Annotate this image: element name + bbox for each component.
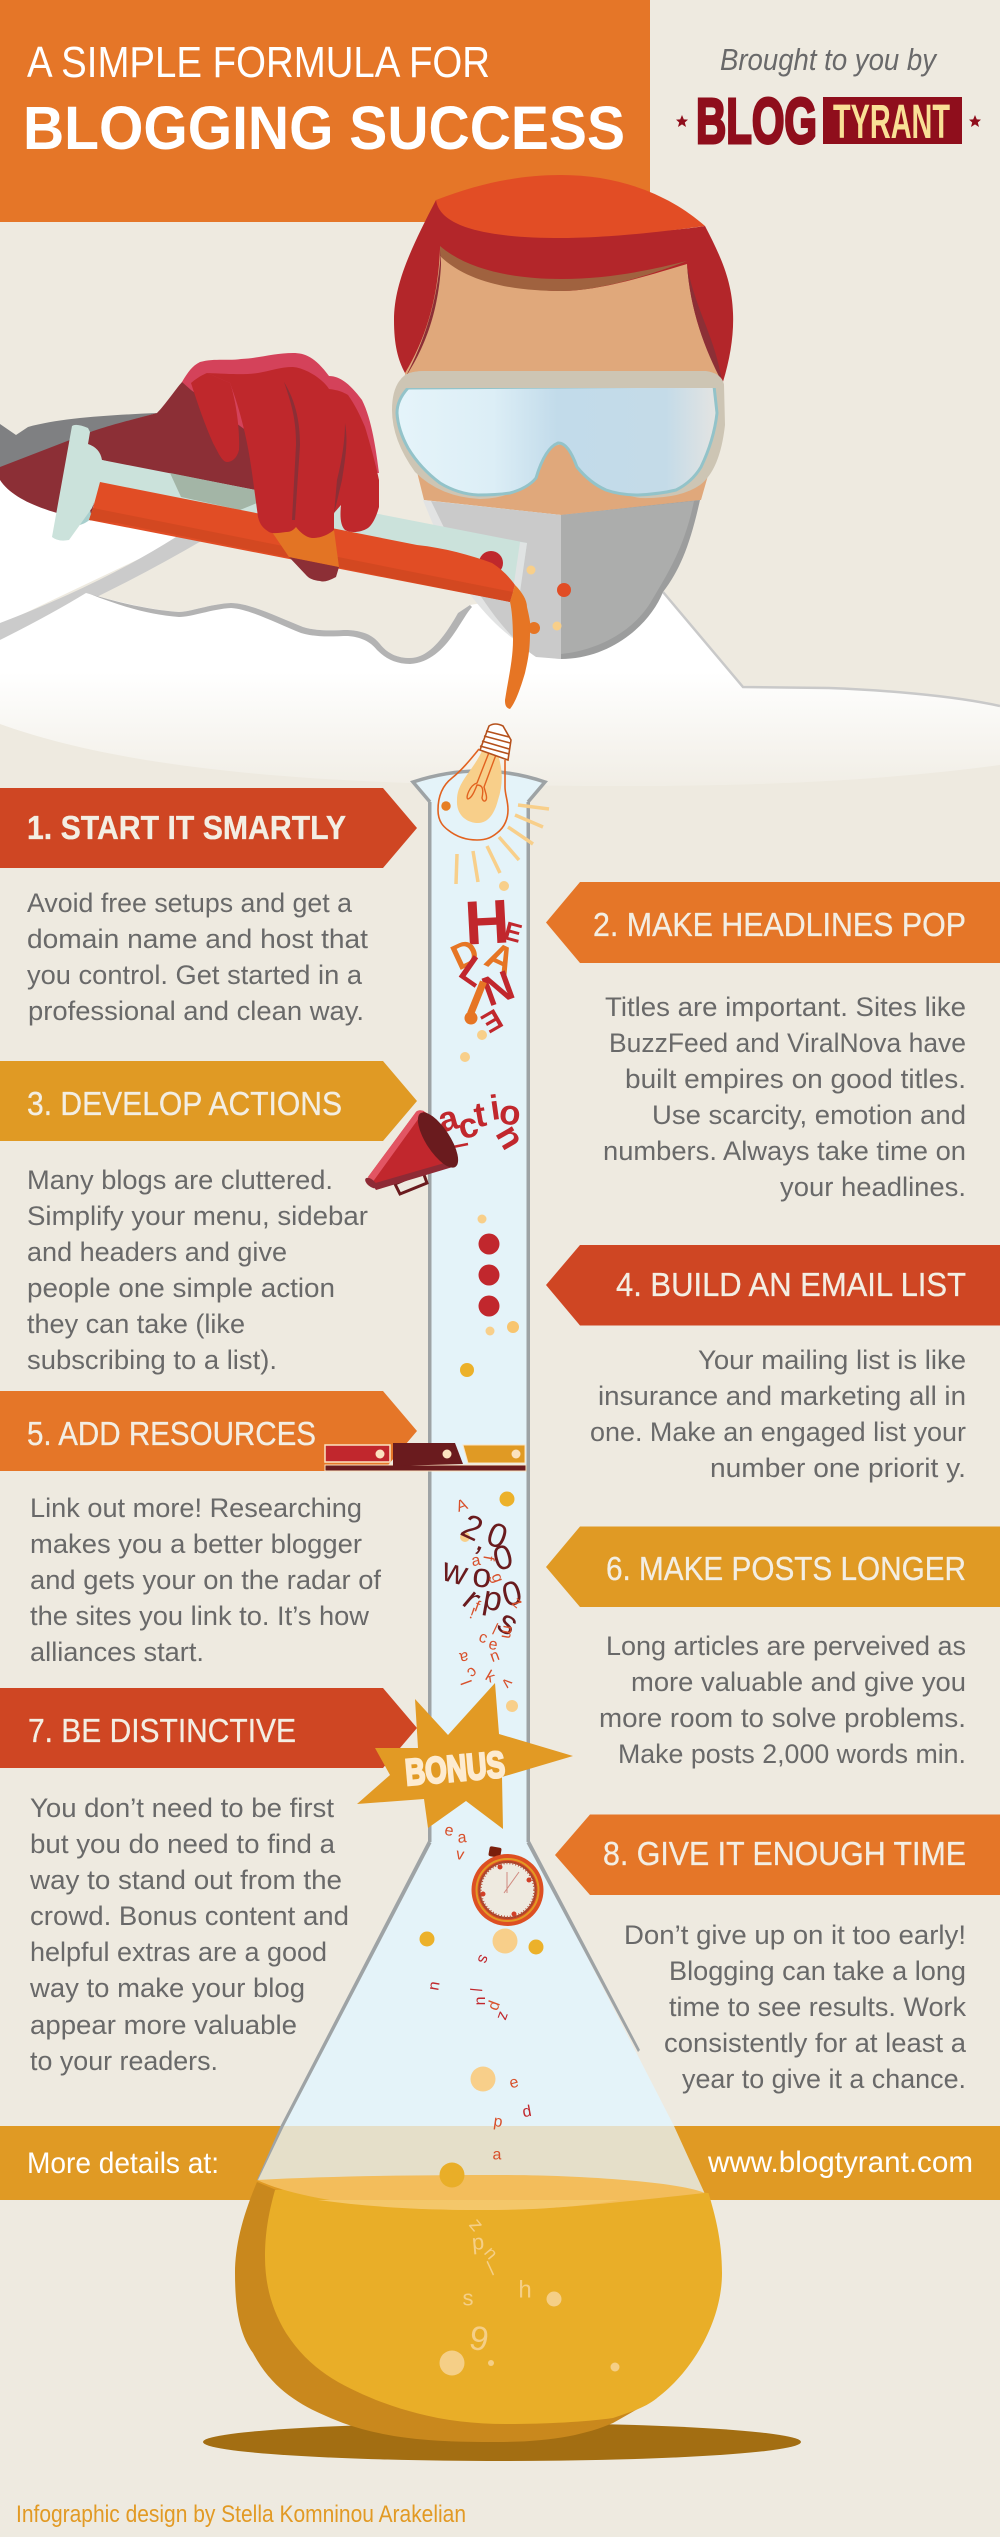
letters in liquid: h <box>518 2276 532 2304</box>
text block 2: BuzzFeed and ViralNova have <box>609 1028 966 1058</box>
letters in liquid: / <box>482 2259 501 2279</box>
banner 3: 3. DEVELOP ACTIONS <box>27 1085 342 1122</box>
falling letters: v <box>455 1846 465 1864</box>
action letters: t <box>471 1095 489 1135</box>
text block 1: professional and clean way. <box>28 996 364 1026</box>
liquid outer shade <box>235 2182 657 2442</box>
action letters: n <box>488 1118 532 1156</box>
title line two: BLOGGING SUCCESS <box>23 94 625 162</box>
banner 6: 6. MAKE POSTS LONGER <box>606 1550 966 1587</box>
banner 5 <box>0 1391 417 1471</box>
hair shadow on forehead <box>440 246 687 291</box>
test tube glass <box>52 425 527 592</box>
headline letters: D <box>445 930 485 978</box>
gray sleeve <box>0 413 157 468</box>
liquid surface <box>257 2175 704 2210</box>
bulb glow <box>457 751 502 823</box>
words letters: z <box>508 1594 526 1612</box>
text block 6 <box>599 1631 966 1769</box>
lower flask dots and letters <box>420 1928 544 2188</box>
headline letters: A <box>479 934 521 984</box>
text block 5: alliances start. <box>30 1637 204 1667</box>
liquid in tube <box>89 482 515 602</box>
flask glass <box>282 771 674 2126</box>
words letters: w <box>437 1550 472 1594</box>
text block 8: time to see results. Work <box>669 1992 966 2022</box>
falling letters <box>443 1822 467 1864</box>
banner 8: 8. GIVE IT ENOUGH TIME <box>603 1835 966 1872</box>
lower flask dots and letters: u <box>426 1980 444 1992</box>
sponsor caption: Brought to you by <box>720 42 938 77</box>
filaments <box>467 750 497 801</box>
text block 1: Avoid free setups and get a <box>27 888 353 918</box>
text block 8: year to give it a chance. <box>682 2064 966 2094</box>
liquid shade <box>89 508 513 602</box>
words letters: 2 <box>455 1507 489 1549</box>
glove fingers <box>207 367 379 538</box>
text block 1: domain name and host that <box>27 924 369 954</box>
bulb dot <box>441 801 451 811</box>
words letters: 0 <box>498 1573 526 1615</box>
lower flask dots and letters: z <box>494 2009 512 2023</box>
banner 8 <box>555 1814 1000 1895</box>
text block 8: consistently for at least a <box>664 2028 967 2058</box>
flask walls <box>257 771 640 2180</box>
headline letters: N <box>476 961 520 1015</box>
headline letters: L <box>451 948 495 996</box>
more details label: More details at: <box>27 2147 219 2180</box>
banner 5: 5. ADD RESOURCES <box>27 1415 316 1452</box>
header panel <box>0 0 650 222</box>
glove cuff <box>182 353 379 473</box>
bulb glass outline <box>438 749 508 840</box>
text block 6: Long articles are perveived as <box>606 1631 966 1661</box>
lower flask dots and letters: e <box>507 2074 521 2092</box>
text block 8: Don’t give up on it too early! <box>624 1920 966 1950</box>
words letters: ! <box>467 1605 477 1623</box>
letters in liquid <box>440 2214 620 2376</box>
text block 6: Make posts 2,000 words min. <box>618 1739 966 1769</box>
text block 3: Many blogs are cluttered. <box>27 1165 333 1195</box>
pouring liquid <box>505 585 530 709</box>
face <box>405 249 724 515</box>
words letters: l <box>456 1678 474 1688</box>
banner 2: 2. MAKE HEADLINES POP <box>593 906 966 943</box>
lower flask dots and letters: s <box>474 1952 492 1966</box>
text block 7: way to make your blog <box>29 1973 305 2003</box>
text block 8 <box>624 1920 967 2094</box>
glove thumb <box>191 373 239 462</box>
action letters: i <box>487 1088 503 1128</box>
words letters: 0 <box>489 1537 517 1579</box>
text block 3: people one simple action <box>27 1273 335 1303</box>
words letters: u <box>488 1647 502 1667</box>
words letters: c <box>476 1629 490 1647</box>
headline letters: E <box>501 915 525 949</box>
words letters: m <box>497 1624 517 1640</box>
glove creases <box>284 382 346 520</box>
text block 4: number one priorit y. <box>710 1453 966 1483</box>
words letters: , <box>471 1521 495 1559</box>
text block 5: makes you a better blogger <box>30 1529 362 1559</box>
words letters: v <box>498 1674 516 1692</box>
headline letters: E <box>476 1003 508 1039</box>
words letters: a <box>470 1552 482 1570</box>
light rays <box>456 805 549 884</box>
hair <box>394 200 733 385</box>
falling letters: e <box>443 1822 455 1840</box>
flask neck over bar <box>258 2126 704 2193</box>
bonus star <box>357 1683 573 1829</box>
falling letters: a <box>457 1829 467 1847</box>
hair inner shade <box>405 250 722 382</box>
text block 5: and gets your on the radar of <box>30 1565 381 1595</box>
text block 3: they can take (like <box>27 1309 245 1339</box>
text block 7: appear more valuable <box>30 2010 297 2040</box>
lower flask dots and letters: d <box>521 2103 533 2121</box>
text block 3: Simplify your menu, sidebar <box>27 1201 368 1231</box>
text block 2: built empires on good titles. <box>625 1064 966 1094</box>
text block 8: Blogging can take a long <box>669 1956 966 1986</box>
drip droplets <box>526 566 571 634</box>
banner 1: 1. START IT SMARTLY <box>27 809 346 846</box>
words letters: r <box>455 1581 489 1617</box>
banner 7: 7. BE DISTINCTIVE <box>28 1712 296 1749</box>
words letters: 0 <box>482 1515 512 1557</box>
text block 4: insurance and marketing all in <box>598 1381 966 1411</box>
words letters: f <box>479 1554 497 1562</box>
text block 3 <box>27 1165 368 1375</box>
lower flask dots and letters: p <box>492 2113 504 2131</box>
bonus text: BONUS <box>403 1744 507 1793</box>
text block 2: Titles are important. Sites like <box>605 992 966 1022</box>
lower flask dots and letters: p <box>485 1999 505 2013</box>
text block 7: but you do need to find a <box>30 1829 336 1859</box>
text block 2: numbers. Always take time on <box>603 1136 966 1166</box>
hair cap <box>436 175 705 238</box>
letters in liquid: s <box>462 2286 474 2310</box>
words letters: / <box>491 1621 499 1639</box>
bottom bar <box>0 2126 1000 2200</box>
fingers through liquid <box>272 525 339 567</box>
text block 2: your headlines. <box>780 1172 966 1202</box>
text block 3: and headers and give <box>27 1237 287 1267</box>
headline letters <box>445 881 525 1062</box>
text block 7: helpful extras are a good <box>30 1937 327 1967</box>
text block 2 <box>603 992 966 1202</box>
words letters: s <box>491 1602 525 1644</box>
banner 3 <box>0 1061 417 1141</box>
flask shadow <box>203 2423 801 2461</box>
words letters: g <box>487 1571 507 1585</box>
shadow through glass <box>170 473 257 510</box>
design credit: Infographic design by Stella Komninou Arakelian <box>16 2501 466 2528</box>
words letters: c <box>463 1663 481 1681</box>
fingertip behind liquid <box>289 557 339 582</box>
website url: www.blogtyrant.com <box>707 2146 973 2179</box>
lower flask dots and letters: u <box>472 1997 490 2005</box>
letters in liquid: z <box>464 2214 488 2236</box>
text block 7: crowd. Bonus content and <box>30 1901 349 1931</box>
banner 7 <box>0 1688 417 1768</box>
text block 7: You don’t need to be first <box>30 1793 334 1823</box>
action letters <box>434 1088 532 1156</box>
words letters: a <box>458 1648 470 1666</box>
text block 5: Link out more! Researching <box>30 1493 362 1523</box>
flask <box>235 771 722 2442</box>
action letters: a <box>434 1098 463 1140</box>
banner 4 <box>546 1245 1000 1326</box>
liquid main <box>265 2180 722 2424</box>
text block 7 <box>29 1793 349 2076</box>
headline letters: I <box>460 969 494 1027</box>
liquid red drop <box>479 551 503 575</box>
words letters: A <box>454 1496 470 1516</box>
lab coat <box>0 470 1000 786</box>
red dots <box>460 1214 519 1377</box>
lower flask dots and letters: a <box>493 2146 502 2164</box>
dark forearm <box>0 382 262 523</box>
letters in liquid: 9 <box>466 2319 492 2359</box>
face mask <box>423 500 700 659</box>
liquid surface lower <box>318 2200 620 2210</box>
text block 6: more room to solve problems. <box>599 1703 966 1733</box>
banner 1 <box>0 788 417 868</box>
words letters: k <box>482 1668 499 1687</box>
logo stars <box>676 115 981 127</box>
text block 2: Use scarcity, emotion and <box>652 1100 966 1130</box>
text block 1: you control. Get started in a <box>27 960 363 990</box>
text block 7: to your readers. <box>30 2046 218 2076</box>
words letters: f <box>472 1598 483 1616</box>
words letters: o <box>471 1556 493 1596</box>
words letters: d <box>479 1583 505 1623</box>
goggles <box>392 371 725 499</box>
text block 4: one. Make an engaged list your <box>590 1417 966 1447</box>
text block 5 <box>30 1493 381 1667</box>
letters in liquid: n <box>480 2243 502 2263</box>
letters in liquid: p <box>471 2229 485 2255</box>
text block 6: more valuable and give you <box>631 1667 966 1697</box>
action letters: c <box>454 1105 482 1147</box>
light bulb <box>438 724 549 884</box>
words letters: e <box>487 1636 499 1654</box>
logo word blog: BLOG <box>696 85 817 157</box>
bulb screw <box>480 724 511 760</box>
text block 3: subscribing to a list). <box>27 1345 277 1375</box>
megaphone icon <box>363 1107 465 1194</box>
words letters <box>437 1492 526 1712</box>
banner 6 <box>546 1526 1000 1607</box>
text block 5: the sites you link to. It’s how <box>30 1601 370 1631</box>
text block 7: way to stand out from the <box>29 1865 342 1895</box>
text block 4 <box>590 1345 966 1483</box>
lower flask dots and letters: / <box>466 1986 484 1994</box>
text block 4: Your mailing list is like <box>698 1345 966 1375</box>
sponsor logo <box>676 42 981 157</box>
banner 4: 4. BUILD AN EMAIL LIST <box>616 1266 966 1303</box>
text block 1 <box>27 888 369 1026</box>
banner 2 <box>546 882 1000 963</box>
scientist head <box>392 175 733 659</box>
action letters: o <box>498 1093 522 1133</box>
headline letters: H <box>463 887 511 959</box>
books icon <box>325 1443 526 1471</box>
title line one: A SIMPLE FORMULA FOR <box>27 38 490 87</box>
stopwatch icon <box>472 1846 544 1926</box>
hand holding test tube <box>0 353 571 709</box>
